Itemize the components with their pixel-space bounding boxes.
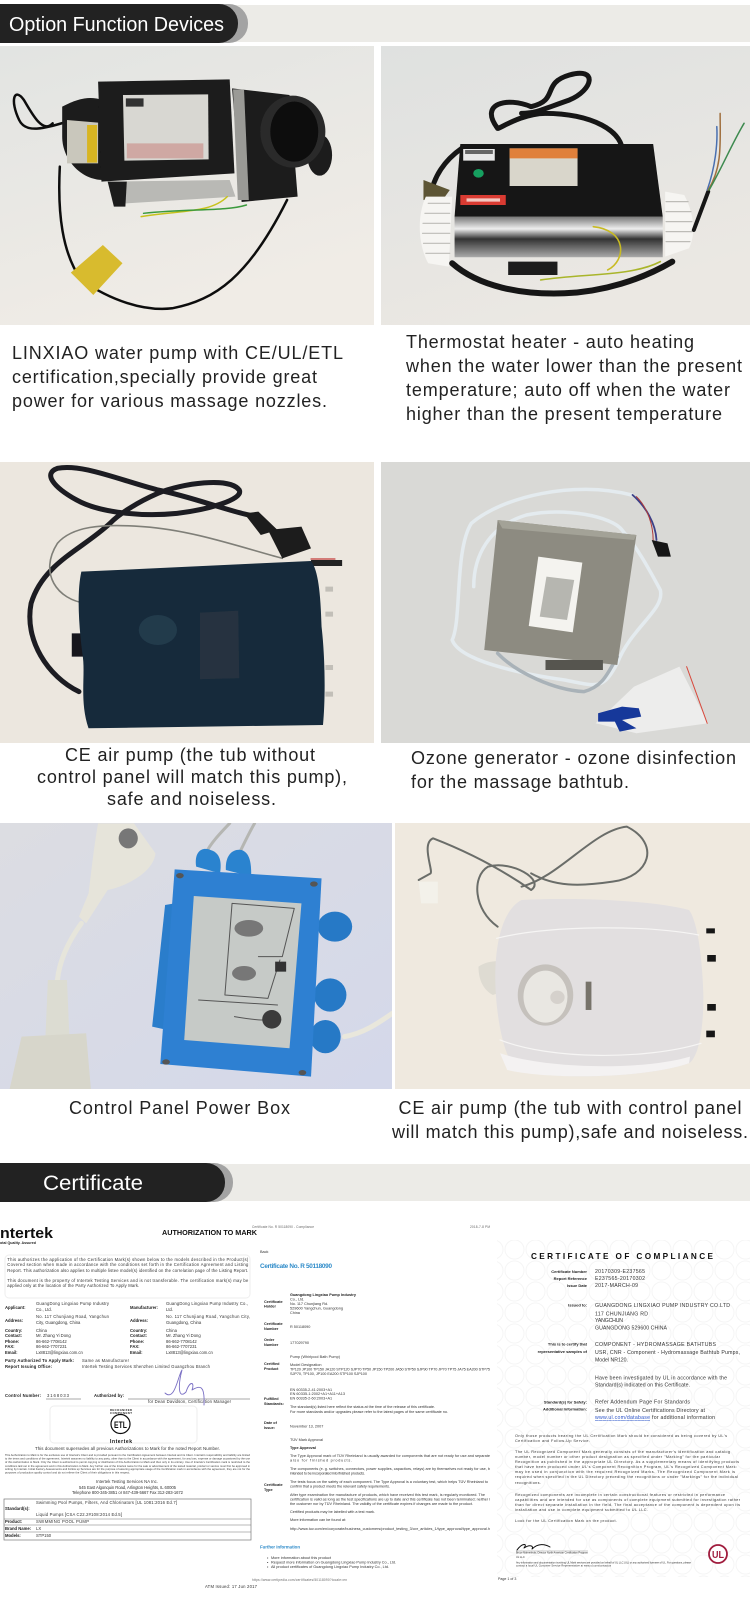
- photo: control panel power box: [0, 823, 392, 1089]
- certificate: TUV certificate: Holder: [264, 1304, 277, 1308]
- certificate: Intertek authorization to mark: Ltd.: [166, 1307, 173, 1312]
- certificate: UL certificate of compliance: Recognized components are incomplete in certain constructional features or restricted in performance: [515, 1493, 725, 1497]
- certificate: Intertek authorization to mark: GuangDong Lingxiao Pump Industry: [36, 1301, 110, 1306]
- certificate: Intertek authorization to mark: 86-662-7708142: [36, 1339, 67, 1344]
- certificate: Intertek authorization to mark: 86-662-7707231: [166, 1344, 197, 1349]
- certificate: Intertek authorization to mark: 545 East Algonquin Road, Arlington Heights, IL 60005: [79, 1485, 177, 1490]
- certificate: Intertek authorization to mark: ETL: [114, 1420, 127, 1430]
- certificate: TUV certificate: intended to be incorporated into finished products.: [290, 1472, 365, 1476]
- certificate: UL certificate of compliance: 20170309-E237565: [595, 1269, 645, 1275]
- certificate: Intertek authorization to mark: Models:: [5, 1533, 21, 1538]
- certificate: TUV certificate: •: [267, 1565, 269, 1569]
- certificate: Intertek authorization to mark: Report. This authorization also applies to multiple listee model(s) identified on the correlation page of the Listing Report.: [7, 1268, 248, 1273]
- certificate: TUV certificate: Number: [264, 1327, 279, 1331]
- certificate: UL certificate of compliance: Issue Date: [567, 1283, 588, 1288]
- certificate: UL certificate of compliance: Any information and documentation involving UL Mark services are provided on behalf of UL LLC (UL) or any authorized licensee of UL. For questions, please: [516, 1560, 692, 1564]
- certificate: Intertek authorization to mark: Manufacturer:: [130, 1305, 158, 1310]
- certificate: TUV certificate: R 50118090: [290, 1325, 310, 1329]
- certificate: TUV certificate: Model Designation: [290, 1363, 321, 1367]
- certificate: Intertek authorization to mark: Covered section when made in accordance with the conditions set forth in the Certification Agreement and Listing: [7, 1262, 249, 1267]
- caption: thermostat heater: when the water lower than the present: [405, 356, 742, 376]
- certificate: TUV certificate: The Type Approval mark of TÜV Rheinland is usually awarded for components that are not ready for use and separate: [290, 1454, 490, 1458]
- certificate: UL certificate of compliance: See the UL Online Certifications Directory at: [595, 1408, 706, 1414]
- certificate: TUV certificate: After type examination the manufacture of products, which have received this test mark, is regularly monitored. The: [290, 1493, 485, 1497]
- photo: ozone generator: [381, 462, 750, 743]
- certificate: Intertek authorization to mark: 86-662-7708142: [166, 1339, 197, 1344]
- certificate: Intertek authorization to mark: FAX:: [5, 1344, 15, 1349]
- certificate: TUV certificate: Certificate: [264, 1483, 283, 1487]
- certificate: Intertek authorization to mark: Brand Name:: [5, 1526, 31, 1531]
- certificate: Intertek authorization to mark: 86-662-7707231: [36, 1344, 67, 1349]
- certificate: TUV certificate: confirm that a product meets the relevant safety requirements.: [290, 1484, 390, 1488]
- certificate: UL certificate of compliance: Have been investigated by UL in accordance with the: [595, 1376, 727, 1382]
- certificate: UL certificate of compliance: Only those products bearing the UL Certification Mark should be considered as being covered by UL's: [515, 1434, 727, 1438]
- certificate: UL certificate of compliance: The UL Recognized Component Mark generally consists of the manufacturer's identification and catalog: [515, 1450, 730, 1454]
- certificate: UL certificate of compliance: COMPONENT - HYDROMASSAGE BATHTUBS: [595, 1342, 717, 1348]
- certificate: Intertek authorization to mark: Guangdong, China: [166, 1320, 202, 1325]
- certificate: TUV certificate: Certified products may be labelled with a test mark.: [290, 1510, 375, 1514]
- certificate: Intertek authorization to mark: conditions laid out in the agreement and in this Authorization to Mark. Any further use of the Intertek name for the sale or advertisement of the tested material, product or service must first be approved in: [5, 1464, 251, 1468]
- certificate: Intertek authorization to mark: Intertek: [110, 1439, 132, 1445]
- photo: thermostat heater: [381, 46, 750, 325]
- certificate: Intertek authorization to mark: Address:: [130, 1318, 148, 1323]
- certificate: UL certificate of compliance: Report Reference: [554, 1276, 588, 1281]
- certificate: TUV certificate: More information about this product: [271, 1556, 332, 1560]
- certificate: TUV certificate: Product: [264, 1367, 279, 1371]
- certificate: UL certificate of compliance: This is to certify that: [548, 1342, 588, 1346]
- certificate: TUV certificate: 529600 Yangchun, Guangdong: [290, 1306, 343, 1310]
- certificate: Intertek authorization to mark: City, Guangdong, China: [36, 1320, 81, 1325]
- caption: thermostat heater: Thermostat heater - auto heating: [406, 332, 694, 352]
- certificate: TUV certificate: [252, 1225, 490, 1582]
- certificate: TUV certificate: The components (e. g. switches, connectors, power supplies, capacitors, relays) are by themselves not ready for use, b: [290, 1467, 490, 1471]
- certificate: UL certificate of compliance: Issued to:: [568, 1302, 587, 1308]
- certificate: TUV certificate: 2018-7-8 PM: [470, 1225, 490, 1229]
- certificate: TUV certificate: Further Information: [260, 1544, 300, 1550]
- certificate: Intertek authorization to mark: Address:: [5, 1318, 23, 1323]
- certificate: TUV certificate: All product certificates of Guangdong Lingxiao Pump Industry Co., Ltd.: [271, 1565, 389, 1569]
- certificate: Intertek authorization to mark: Product:: [5, 1519, 22, 1524]
- certificate: TUV certificate: the customer nor by TÜV Rheinland. The validity of the certificate expires if changes are made to the product.: [290, 1502, 473, 1506]
- certificate: TUV certificate: Certificate: [264, 1300, 283, 1304]
- certificate: Intertek authorization to mark: Liquid Pumps [CSA C22.2#108:2014 Ed.5]: [36, 1512, 122, 1517]
- certificate: TUV certificate: certification is valid as long as the test specifications are up to date and this certificate has not been terminated; neither l: [290, 1498, 490, 1502]
- certificate: UL certificate of compliance: 2017-MARCH-09: [595, 1283, 638, 1289]
- certificate: UL certificate of compliance: Standard(s) for Safety:: [544, 1400, 587, 1404]
- certificate: Intertek authorization to mark: Telephone 800-345-3851 or 847-439-5667 Fax 312-283-1672: [72, 1490, 184, 1495]
- certificate: TUV certificate: More information can be found at:: [290, 1518, 346, 1522]
- caption: CE air pump without control panel: control panel will match this pump),: [37, 767, 347, 787]
- certificate: Intertek authorization to mark: Authorized by:: [94, 1393, 124, 1398]
- certificate: TUV certificate: https://www.certipedia.com/certificates/50118090?locale=en: [252, 1578, 347, 1582]
- certificate: UL certificate of compliance: than for direct separate installation in the field. The final acceptance of the component is dependent upon its: [515, 1503, 740, 1507]
- certificate: UL certificate of compliance: required when specified in the UL Directory preceding the recognitions or under "Markings" for the individual: [515, 1475, 738, 1479]
- caption: ozone generator: for the massage bathtub.: [411, 772, 629, 792]
- caption: CE air pump with control panel: [391, 1098, 748, 1142]
- certificate: Intertek authorization to mark: FAX:: [130, 1344, 140, 1349]
- photo: CE air pump white: [395, 823, 750, 1089]
- certificate: Intertek authorization to mark: Contact:: [5, 1333, 22, 1338]
- certificate: TUV certificate: Number: [264, 1343, 279, 1347]
- certificate: UL certificate of compliance: representative samples of: [538, 1349, 588, 1354]
- certificate: TUV certificate: Type Approval: [290, 1446, 316, 1450]
- certificate: Intertek authorization to mark: Phone:: [5, 1339, 19, 1344]
- certificate: TUV certificate: 177029790: [290, 1341, 309, 1345]
- certificate: Intertek authorization to mark: Same as Manufacturer: [82, 1358, 130, 1363]
- caption: water pump: power for various massage nozzles.: [12, 391, 327, 411]
- certificate: Intertek authorization to mark: Intertek Testing Services Shenzhen Limited Guangzhou Branch: [82, 1364, 211, 1369]
- certificate: Intertek authorization to mark: Country:: [5, 1328, 22, 1333]
- certificate: UL certificate of compliance: GUANGDONG LINGXIAO PUMP INDUSTRY CO.LTD: [595, 1303, 730, 1309]
- certificate: Intertek authorization to mark: RECOGNIZED: [110, 1408, 132, 1412]
- certificate: TUV certificate: TP120 JP100 TP150 JA120 STP120 SJP70 TP50 JP150 TP200 JA50 STP50 SJP90 TP70 JP70 TP75 JA75 EA200 STP75: [290, 1368, 490, 1372]
- certificate: UL certificate of compliance: capabilities and are intended for use as components of complete equipment submitted for investigation rather: [515, 1498, 741, 1502]
- certificate: Intertek authorization to mark: Contact:: [130, 1333, 147, 1338]
- certificate: TUV certificate: Certificate No. R 50118090 - Compliance: [252, 1225, 314, 1229]
- certificate: UL certificate of compliance: Bruce Mahrenholz, Director North American Certification Program: [516, 1550, 588, 1554]
- certificate: TUV certificate: November 13, 2007: [290, 1424, 323, 1428]
- certificate: Intertek authorization to mark: STP150: [36, 1533, 52, 1538]
- certificate: TUV certificate: The tests focus on the safety of each component. The Type Approval is a voluntary test, which helps TÜV Rheinland to: [290, 1480, 488, 1484]
- certificate: Intertek authorization to mark: This authorizes the application of the Certification Mark(s) shown below to the models described in the Product(s): [7, 1257, 249, 1262]
- certificate: TUV certificate: Type: [264, 1488, 273, 1492]
- certificate: Intertek authorization to mark: Intertek Testing Services NA Inc.: [96, 1479, 158, 1484]
- certificate: UL certificate of compliance: for additional information: [652, 1415, 715, 1421]
- certificate: UL certificate of compliance: www.ul.com/database: [595, 1415, 650, 1421]
- certificate: Intertek authorization to mark: China: [36, 1328, 48, 1333]
- certificate: UL certificate of compliance: may be used in conjunction with the required Recognized Marks. The Recognized Component Mark is: [515, 1470, 735, 1474]
- certificate: Intertek authorization to mark: applied only at the location of the Party Authorized To Apply Mark.: [7, 1283, 139, 1288]
- certificate: TUV certificate: TÜV Mark Approval: [290, 1438, 323, 1442]
- heading band: Certificate: [0, 1163, 750, 1202]
- certificate: UL certificate of compliance: Recognition as published in the appropriate UL Directory. As a supplementary means of identifying products: [515, 1460, 739, 1464]
- caption: CE air pump with control panel: will match this pump),safe and noiseless.: [391, 1122, 748, 1142]
- certificate: Intertek authorization to mark: otal Quality. Assured: [0, 1241, 36, 1245]
- certificate: Intertek authorization to mark: Standard(s):: [5, 1506, 30, 1511]
- certificate: UL certificate of compliance: [497, 1240, 750, 1581]
- caption: thermostat heater: [405, 332, 742, 424]
- certificate: UL certificate of compliance: E237565-20170302: [595, 1276, 645, 1282]
- certificate: Intertek authorization to mark: Control Number:: [5, 1393, 41, 1398]
- certificate: UL certificate of compliance: Page 1 of 3: [498, 1577, 516, 1581]
- certificate: Intertek authorization to mark: Lx8813@lingxiao.com.cn: [166, 1350, 214, 1355]
- certificate: Intertek authorization to mark: purposes of production quality control and do not relieve the Client of their obligations in this respect.: [5, 1470, 130, 1474]
- certificate: Intertek authorization to mark: No. 117 Chunjiang Road, Yangchun City,: [166, 1314, 250, 1319]
- certificate: UL certificate of compliance: recognitions.: [515, 1481, 541, 1485]
- certificate: TUV certificate: •: [267, 1560, 269, 1564]
- caption: CE air pump without control panel: safe and noiseless.: [107, 789, 276, 809]
- heading band: Option Function Devices: [0, 4, 750, 43]
- certificate: UL certificate of compliance: Model NR120.: [595, 1358, 628, 1364]
- certificate: Intertek authorization to mark: Co., Ltd.: [36, 1307, 52, 1312]
- photo: LINXIAO water pump: [0, 46, 374, 325]
- caption: ozone generator: Ozone generator - ozone disinfection: [411, 748, 736, 768]
- caption: CE air pump with control panel: CE air pump (the tub with control panel: [398, 1098, 742, 1118]
- certificate: UL certificate of compliance: that have been produced under UL's Component Recognition Program, UL's Recognized Component Mark:: [515, 1465, 737, 1469]
- certificate: TUV certificate: SJP70, TP100, JP100 EA200 STP100 SJP100: [290, 1372, 367, 1376]
- heading band: Certificate: Certificate: [43, 1172, 143, 1195]
- certificate: UL certificate of compliance: Certificate Number: [551, 1269, 587, 1274]
- certificate: TUV certificate: Date of: [264, 1421, 278, 1425]
- certificate: Intertek authorization to mark: of this Authorization to Mark. Only the Client is authorized to permit copying or distribution of this Authorization to Mark and then only in its entirety. Use of Intertek's Certification mark is restricted to the: [5, 1460, 251, 1464]
- certificate: TUV certificate: Certified: [264, 1362, 280, 1366]
- heading band: Option Function Devices: Option Function Devices: [9, 14, 224, 36]
- certificate: UL certificate of compliance: Certification and Follow-Up Service.: [515, 1439, 590, 1443]
- certificate: Intertek authorization to mark: Country:: [130, 1328, 147, 1333]
- certificate: UL certificate of compliance: 117 CHUNJIANG RD: [595, 1312, 648, 1318]
- certificate: TUV certificate: Certificate: [264, 1322, 283, 1326]
- certificate: TUV certificate: also for finished products.: [290, 1458, 352, 1462]
- certificate: Intertek authorization to mark: China: [166, 1328, 178, 1333]
- certificate: Intertek authorization to mark: Lx8813@lingxiao.com.cn: [36, 1350, 84, 1355]
- certificate: TUV certificate: Certificate No. R 50118090: [260, 1263, 332, 1270]
- photo: CE air pump navy: [0, 462, 374, 743]
- certificate: UL certificate of compliance: GUANGDONG 529600 CHINA: [595, 1326, 668, 1332]
- certificate: Intertek authorization to mark: This Authorization to Mark is for the exclusive use of Intertek's Client and is provided pursuant to the Certification Agreement between Intertek and its Client. Intertek's responsibility and liability are limited: [5, 1453, 251, 1457]
- caption: thermostat heater: higher than the present temperature: [406, 404, 722, 424]
- certificate: TUV certificate: Order: [264, 1338, 275, 1342]
- certificate: UL certificate of compliance: UL LLC: [516, 1555, 525, 1559]
- certificate: Intertek authorization to mark: No. 117 Chunjiang Road, Yangchun: [36, 1314, 110, 1319]
- certificate: Intertek authorization to mark: Mr. Zhang Yi Dong: [166, 1333, 201, 1338]
- certificate: UL certificate of compliance: number, model number or other product designation as specified under "Marking" for the particular: [515, 1455, 721, 1459]
- certificate: Intertek authorization to mark: Report Issuing Office:: [5, 1364, 52, 1369]
- certificate: Intertek authorization to mark: This document is the property of Intertek Testing Services and is not transferable. The certification mark(s) may be: [7, 1278, 249, 1283]
- certificate: Intertek authorization to mark: for Dean Davidson, Certification Manager: [148, 1399, 232, 1404]
- certificate: UL certificate of compliance: CERTIFICATE OF COMPLIANCE: [531, 1252, 714, 1261]
- caption: CE air pump without control panel: CE air pump (the tub without: [65, 745, 315, 765]
- certificate: Intertek authorization to mark: Applicant:: [5, 1305, 25, 1310]
- caption: ozone generator: [411, 748, 736, 792]
- caption: water pump: certification,specially provide great: [12, 367, 317, 387]
- certificate: TUV certificate: Back: [260, 1250, 269, 1254]
- certificate: Intertek authorization to mark: SWIMMING POOL PUMP: [36, 1519, 89, 1524]
- certificate: Intertek authorization to mark: Phone:: [130, 1339, 144, 1344]
- certificate: TUV certificate: Pump (Whirlpool Bath Pump): [290, 1355, 341, 1359]
- certificate: Intertek authorization to mark: to the terms and conditions of the agreement. Intertek assumes no liability to any party, other than to the Client in accordance with the agreement, for any loss, expense or damage occasioned by the use: [5, 1456, 251, 1460]
- certificate: TUV certificate: Fulfilled: [264, 1397, 279, 1401]
- certificate: Intertek authorization to mark: GuangDong Lingxiao Pump Industry Co.,: [166, 1301, 248, 1306]
- certificate: UL certificate of compliance: USR, CNR - Component - Hydromassage Bathtub Pumps,: [595, 1350, 740, 1356]
- certificate: Intertek authorization to mark: This document supersedes all previous Authorizations to Mark for the noted Report Number.: [35, 1446, 220, 1451]
- certificate: Intertek authorization to mark: LX: [36, 1526, 41, 1531]
- certificate: TUV certificate: EN 60335-2-60:2003+A1: [290, 1396, 332, 1400]
- caption: water pump: LINXIAO water pump with CE/UL/ETL: [12, 343, 343, 363]
- certificate: UL certificate of compliance: YANGCHUN: [595, 1318, 623, 1324]
- certificate: Intertek authorization to mark: [0, 1225, 258, 1589]
- certificate: TUV certificate: •: [267, 1556, 269, 1560]
- certificate: Intertek authorization to mark: 3168033: [47, 1393, 70, 1398]
- certificate: TUV certificate: No. 117 Chunjiang Rd.: [290, 1302, 328, 1306]
- certificate: UL certificate of compliance: contact a local UL Customer Service Representative at www.ul.com/contactus: [516, 1564, 612, 1568]
- certificate: Intertek authorization to mark: COMPONENT: [110, 1411, 132, 1415]
- certificate: TUV certificate: China: [290, 1311, 301, 1315]
- certificate: TUV certificate: Request more information on Guangdong Lingxiao Pump Industry Co., Ltd.: [271, 1560, 396, 1564]
- certificate: Intertek authorization to mark: Mr. Zhang Yi Dong: [36, 1333, 71, 1338]
- certificate: Intertek authorization to mark: writing by Intertek. Initial Factory Assessments and Follow up Services are for the purpose of assuring appropriate usage of the Certification mark in accordance with the agreement, they are not for the: [5, 1467, 251, 1471]
- certificate: TUV certificate: http://www.tuv.com/en/corporate/business_customers/product_testing_3/ovr_articles_1/type_approval/type_approval.h: [290, 1527, 490, 1531]
- certificate: Intertek authorization to mark: Party Authorized To Apply Mark:: [5, 1358, 74, 1363]
- certificate: UL certificate of compliance: Look for the UL Certification Mark on the product.: [515, 1519, 617, 1523]
- certificate: Intertek authorization to mark: ATM Issued: 17 Jun 2017: [205, 1584, 258, 1589]
- caption: CE air pump without control panel: [37, 745, 347, 809]
- certificate: TUV certificate: Issue:: [264, 1426, 275, 1430]
- certificate: UL certificate of compliance: Refer Addendum Page For Standards: [595, 1400, 690, 1406]
- certificate: Intertek authorization to mark: Swimming Pool Pumps, Filters, And Chlorinators [UL 1081:2016 Ed.7]: [36, 1500, 177, 1505]
- certificate: Intertek authorization to mark: ntertek: [0, 1225, 54, 1242]
- certificate: UL certificate of compliance: installation and use in complete equipment submitted to UL LLC.: [515, 1508, 648, 1512]
- certificate: UL certificate of compliance: Additional Information:: [543, 1406, 587, 1412]
- certificate: UL certificate of compliance: UL: [712, 1550, 724, 1561]
- caption: water pump: [12, 343, 343, 411]
- certificate: Intertek authorization to mark: Email:: [130, 1350, 143, 1355]
- certificate: UL certificate of compliance: Standard(s) indicated on this Certificate.: [595, 1382, 690, 1388]
- certificate: TUV certificate: Co., Ltd.: [290, 1298, 304, 1302]
- certificate: TUV certificate: EN 60335-2-41:2003+A1: [290, 1388, 332, 1392]
- caption: thermostat heater: temperature; auto off when the water: [406, 380, 730, 400]
- caption: control panel power box: Control Panel Power Box: [69, 1098, 290, 1118]
- certificate: TUV certificate: For more standards and/or upgrades please refer to the latest pages of the same certificate no.: [290, 1410, 448, 1414]
- certificate: TUV certificate: Guangdong Lingxiao Pump Industry: [290, 1293, 357, 1297]
- certificate: Intertek authorization to mark: Email:: [5, 1350, 18, 1355]
- certificate: TUV certificate: EN 60335-1:2002+A1+A11+A13: [290, 1392, 345, 1396]
- certificate: TUV certificate: The standard(s) listed here reflect the status at the time of the release of this certificate.: [290, 1405, 435, 1409]
- certificate: Intertek authorization to mark: AUTHORIZATION TO MARK: [162, 1228, 258, 1237]
- certificate: TUV certificate: Standards:: [264, 1402, 284, 1406]
